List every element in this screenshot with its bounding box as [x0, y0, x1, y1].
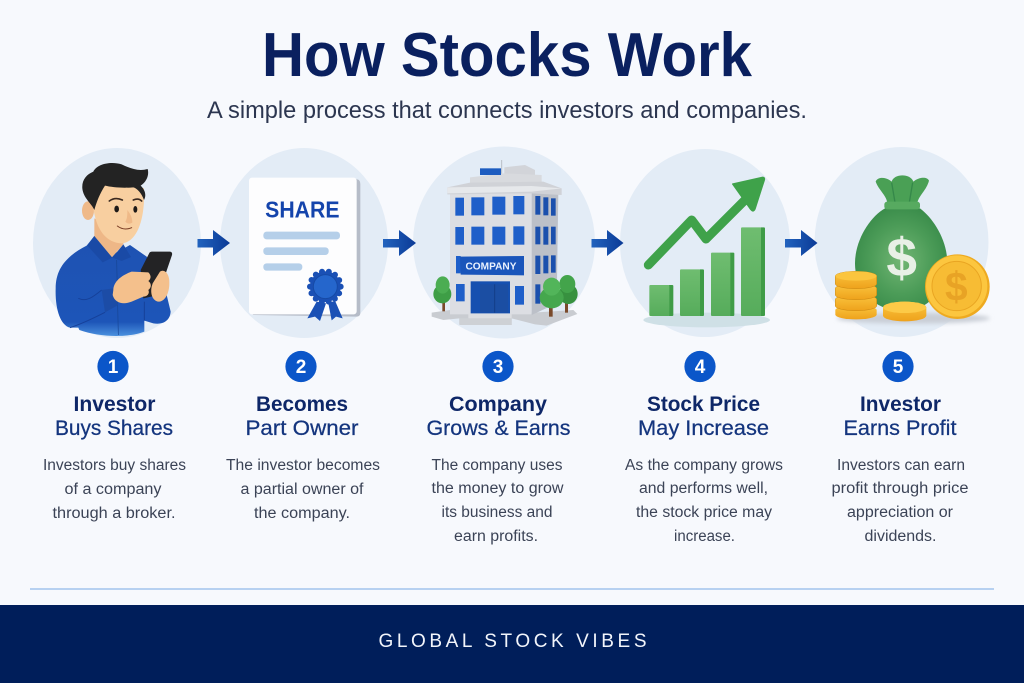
description — [226, 457, 380, 522]
description: The investor becomes — [226, 457, 380, 474]
panel: step 2 becomes part owner — [220, 148, 388, 522]
step number 2 — [285, 351, 317, 382]
description: the company. — [254, 505, 350, 522]
step number 4 — [684, 351, 716, 382]
heading: Becomes — [256, 393, 348, 416]
description — [625, 457, 783, 545]
heading: Investor — [860, 393, 941, 416]
icon: money bag and coins: $ — [886, 226, 917, 288]
heading: Buys Shares — [55, 417, 173, 440]
description: a partial owner of — [240, 481, 364, 498]
icon: money bag and coins: $ — [945, 264, 968, 310]
icon backdrop circle — [413, 146, 595, 338]
step number 5: 5 — [893, 357, 904, 378]
icon backdrop circle — [33, 148, 201, 338]
footer brand text: GLOBAL STOCK VIBES — [378, 631, 646, 652]
description: through a broker. — [52, 505, 176, 522]
heading: Investor — [74, 393, 156, 416]
description: the stock price may — [636, 504, 772, 521]
arrow 3 to 4 — [592, 230, 624, 256]
heading — [246, 393, 359, 440]
description: As the company grows — [625, 457, 783, 474]
step number 1 — [97, 351, 129, 382]
subtitle: A simple process that connects investors and companies. — [207, 97, 807, 124]
icon: company building — [432, 160, 578, 326]
icon: money bag and coins — [835, 175, 990, 324]
icon backdrop circle — [620, 149, 790, 337]
heading — [638, 393, 769, 440]
panel: step 1 investor buys shares — [33, 148, 201, 522]
icon backdrop circle — [814, 147, 988, 337]
step number 3: 3 — [493, 357, 503, 378]
arrow 4 to 5 — [785, 230, 818, 256]
heading: Stock Price — [647, 393, 760, 416]
panel: step 4 stock price may increase — [620, 149, 790, 545]
arrow 1 to 2 — [198, 230, 230, 256]
step number 2: 2 — [296, 357, 306, 378]
heading: Earns Profit — [844, 417, 957, 440]
description: appreciation or — [847, 504, 953, 521]
title: How Stocks Work — [262, 21, 752, 90]
heading — [844, 393, 957, 440]
description: of a company — [64, 481, 162, 498]
panel: step 3 company grows and earns — [413, 146, 595, 545]
description — [432, 457, 564, 545]
description: dividends. — [864, 528, 936, 545]
icon: investor with phone — [56, 163, 172, 336]
description: Investors can earn — [837, 457, 965, 474]
step number 4: 4 — [695, 357, 706, 378]
heading: Company — [449, 393, 547, 416]
icon: company building: COMPANY — [465, 262, 517, 273]
panel: step 5 investor earns profit — [814, 147, 990, 545]
description: profit through price — [832, 480, 968, 497]
description: increase. — [674, 528, 735, 545]
description: earn profits. — [454, 528, 538, 545]
description — [832, 457, 968, 545]
description — [43, 457, 186, 522]
heading: Grows & Earns — [426, 417, 570, 440]
description: Investors buy shares — [43, 457, 186, 474]
icon backdrop circle — [220, 148, 388, 338]
arrow 2 to 3 — [383, 230, 416, 256]
description: and performs well, — [639, 480, 768, 497]
heading: May Increase — [638, 417, 769, 440]
icon: rising bar chart with arrow — [643, 177, 770, 327]
description: The company uses — [432, 457, 563, 474]
footer band — [0, 605, 1024, 683]
description: the money to grow — [432, 480, 564, 497]
heading — [426, 393, 570, 440]
icon: share certificate — [249, 178, 360, 321]
step number 5 — [882, 351, 914, 382]
heading — [55, 393, 173, 440]
step number 1: 1 — [108, 357, 119, 378]
description: its business and — [442, 504, 552, 521]
icon: share certificate: SHARE — [265, 196, 339, 222]
step number 3 — [482, 351, 514, 382]
heading: Part Owner — [246, 417, 359, 440]
